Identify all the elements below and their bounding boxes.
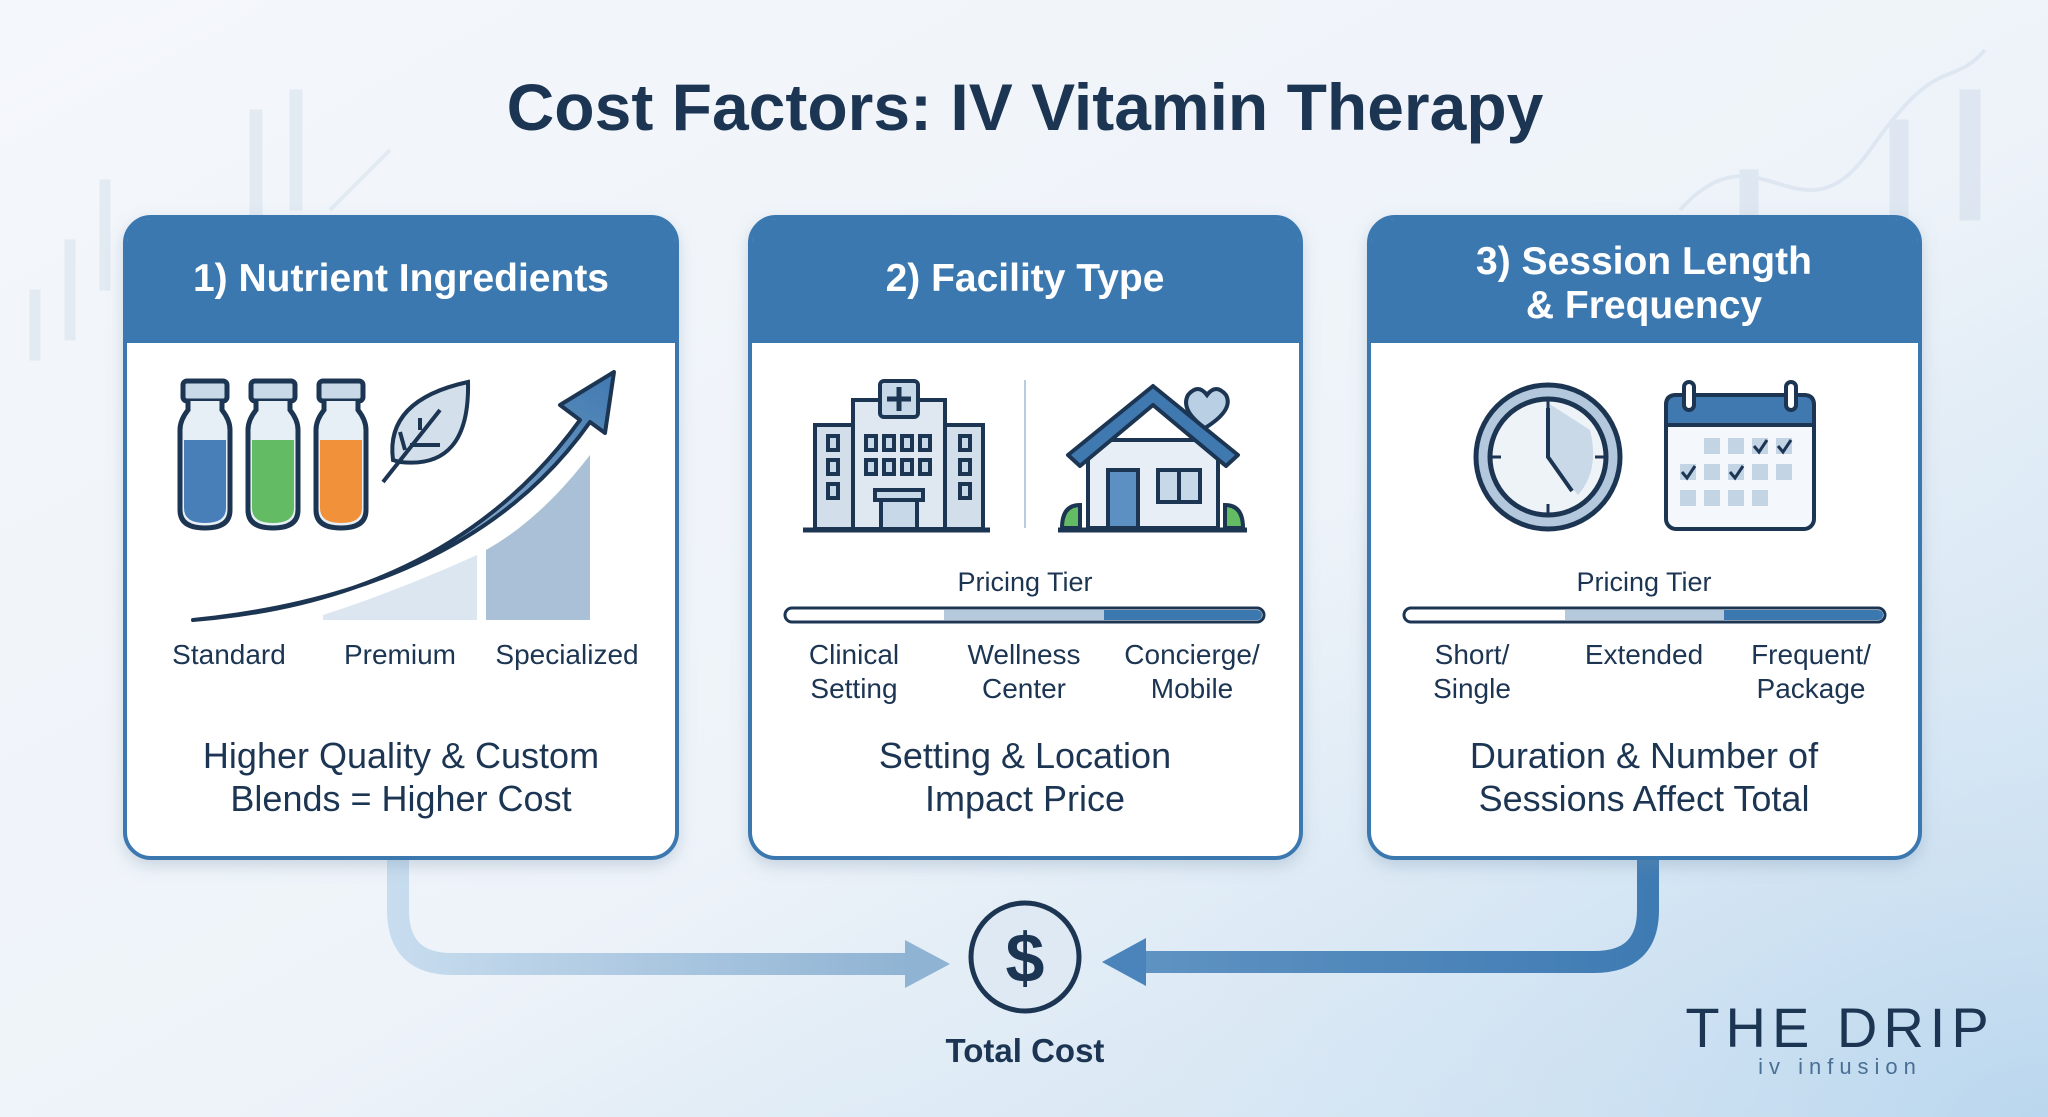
text: summary: Higher Quality & Custom bbox=[203, 735, 599, 776]
panel: nutrient ingredients bbox=[125, 217, 677, 858]
panel: session length bbox=[1369, 217, 1920, 858]
labels: session tiers: Short/ bbox=[1435, 639, 1510, 670]
panel: facility type bbox=[750, 217, 1301, 858]
label: pricing tier: Pricing Tier bbox=[1576, 567, 1712, 597]
labels: facility tiers: Mobile bbox=[1151, 673, 1233, 704]
labels: session tiers: Extended bbox=[1585, 639, 1703, 670]
logo: iv infusion bbox=[1758, 1054, 1922, 1079]
icon: house bbox=[1058, 386, 1247, 530]
logo: THE DRIP bbox=[1685, 996, 1995, 1059]
panel: facility type: Impact Price bbox=[925, 778, 1125, 819]
labels: facility tiers: Center bbox=[982, 673, 1066, 704]
title: Cost Factors: IV Vitamin Therapy bbox=[507, 70, 1544, 144]
icon: leaf bbox=[383, 382, 468, 482]
icon: clock bbox=[1476, 385, 1620, 529]
heading: & Frequency bbox=[1526, 284, 1762, 327]
icon: dollar coin bbox=[971, 903, 1079, 1011]
icon: calendar bbox=[1666, 382, 1814, 529]
labels: tiers: Standard bbox=[172, 639, 286, 670]
labels: facility tiers: Concierge/ bbox=[1124, 639, 1260, 670]
labels: session tiers: Frequent/ bbox=[1751, 639, 1871, 670]
labels: tiers bbox=[172, 639, 639, 670]
icon: dollar coin: $ bbox=[1006, 919, 1044, 997]
arrow: right connector bbox=[1102, 858, 1648, 986]
chart: rising cost bbox=[193, 372, 614, 620]
labels: facility tiers: Setting bbox=[810, 673, 898, 704]
labels: tiers: Premium bbox=[344, 639, 456, 670]
heading: 1) Nutrient Ingredients bbox=[193, 257, 609, 300]
panel: nutrient ingredients: Blends = Higher Cost bbox=[230, 778, 572, 819]
bar: pricing tier bbox=[1404, 608, 1885, 622]
text: summary: Setting & Location bbox=[879, 735, 1171, 776]
heading: 3) Session Length bbox=[1476, 240, 1812, 283]
heading: 2) Facility Type bbox=[886, 257, 1164, 300]
labels: session tiers: Single bbox=[1433, 673, 1511, 704]
labels: facility tiers: Clinical bbox=[809, 639, 899, 670]
text: summary: Duration & Number of bbox=[1470, 735, 1819, 776]
labels: facility tiers: Wellness bbox=[967, 639, 1081, 670]
label: total cost: Total Cost bbox=[946, 1032, 1104, 1069]
heading bbox=[1476, 240, 1812, 327]
icon: hospital bbox=[803, 381, 990, 530]
labels: tiers: Specialized bbox=[495, 639, 639, 670]
arrow: left connector bbox=[398, 858, 950, 988]
labels: session tiers bbox=[1433, 639, 1871, 704]
label: pricing tier: Pricing Tier bbox=[957, 567, 1093, 597]
bar: pricing tier bbox=[785, 608, 1264, 622]
labels: session tiers: Package bbox=[1757, 673, 1865, 704]
panel: session length: Sessions Affect Total bbox=[1479, 778, 1809, 819]
labels: facility tiers bbox=[809, 639, 1260, 704]
icon: vials bbox=[180, 381, 366, 528]
